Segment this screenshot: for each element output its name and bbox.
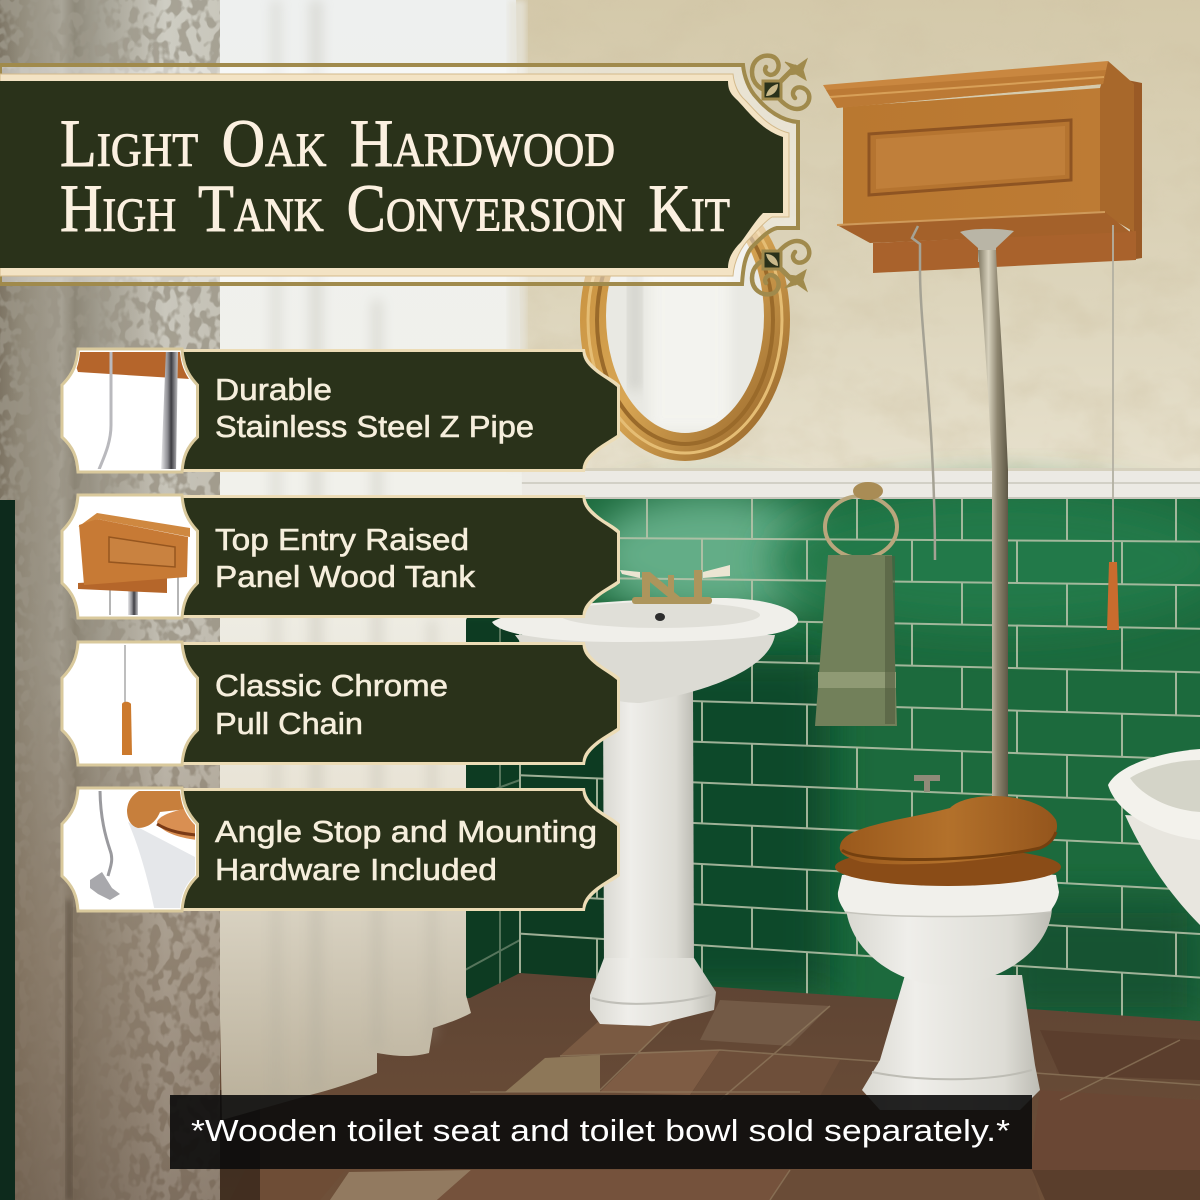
title text	[60, 105, 730, 246]
ornament: bottom corner scroll	[752, 241, 809, 294]
feature 3 bar	[180, 642, 620, 765]
banner outer gold frame	[0, 65, 798, 284]
feature 2 text: Top Entry Raised	[215, 522, 469, 557]
oak high tank	[823, 61, 1142, 273]
feature 2 text	[215, 522, 476, 594]
feature 1: stainless steel z pipe	[62, 349, 620, 472]
disclaimer footer bar	[170, 1095, 1032, 1169]
green tile wall	[440, 490, 1200, 1035]
banner cream border	[0, 74, 789, 276]
title text: Light Oak Hardwood	[60, 105, 615, 181]
feature 4 text: Angle Stop and Mounting	[215, 814, 597, 849]
feature 2 photo tile	[62, 495, 198, 618]
floor	[0, 973, 1200, 1200]
feature 3 photo tile	[62, 642, 198, 765]
feature 1 text: Durable	[215, 372, 332, 407]
towel ring	[825, 482, 897, 558]
feature 2 bar	[180, 495, 620, 618]
feature 4 bar	[180, 788, 620, 911]
towel	[815, 555, 897, 726]
title text: High Tank Conversion Kit	[60, 170, 730, 246]
feature 3 text	[215, 668, 448, 741]
feature 4 photo tile	[62, 788, 198, 912]
toilet	[835, 796, 1061, 1110]
pedestal sink	[492, 598, 798, 1026]
banner dark panel	[0, 81, 783, 268]
angle stop	[914, 775, 940, 792]
brass faucet	[620, 565, 730, 604]
feature 1 photo tile	[62, 349, 198, 472]
feature 1 bar	[180, 349, 620, 472]
disclaimer text: *Wooden toilet seat and toilet bowl sold separately.*	[191, 1113, 1010, 1148]
feature 1 text: Stainless Steel Z Pipe	[215, 409, 534, 444]
window sheer curtain	[200, 0, 526, 1120]
flush pipe	[960, 229, 1014, 800]
wall	[500, 0, 1200, 500]
oval gilt mirror	[580, 226, 790, 461]
ornament: top corner scroll	[752, 56, 809, 109]
feature 1 text	[215, 372, 534, 444]
left overflow chain	[912, 226, 935, 560]
patterned drape	[0, 0, 220, 1200]
feature 4: angle stop and mounting hardware	[62, 788, 620, 912]
bathtub	[1108, 749, 1200, 925]
feature 4 text: Hardware Included	[215, 852, 497, 887]
feature 3 text: Classic Chrome	[215, 668, 448, 703]
feature 2: raised panel wood tank	[62, 495, 620, 618]
pull chain and handle	[1107, 225, 1119, 630]
feature 3: classic chrome pull chain	[62, 642, 620, 765]
title banner	[0, 56, 809, 294]
chair rail	[510, 468, 1200, 499]
feature 3 text: Pull Chain	[215, 706, 363, 741]
feature 4 text	[215, 814, 597, 887]
feature 2 text: Panel Wood Tank	[215, 559, 476, 594]
